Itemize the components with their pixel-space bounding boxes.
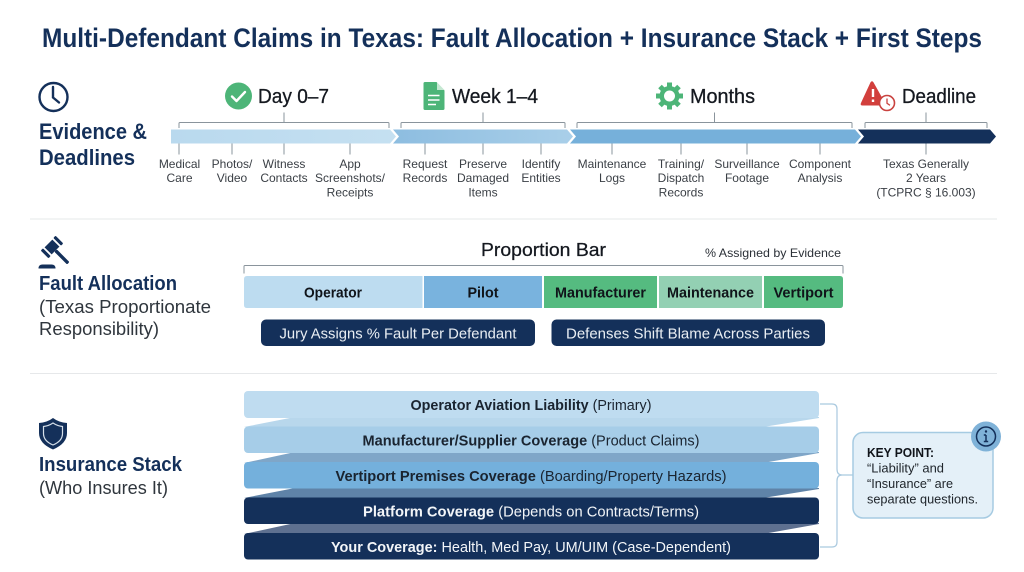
panel: insurance stack (39, 391, 1001, 560)
step labels: Surveillance (714, 157, 780, 171)
layer: manufacturer supplier coverage (244, 426, 819, 453)
phase: deadline (861, 82, 976, 110)
step labels: 2 Years (906, 171, 946, 185)
step labels: Care (166, 171, 193, 185)
callout text: KEY POINT: (867, 445, 934, 460)
callout: key point (853, 422, 1001, 518)
ticks below timeline (179, 144, 926, 154)
phase: day 0-7 (225, 82, 329, 110)
segment: manufacturer (544, 276, 657, 308)
icon: check circle (225, 82, 252, 110)
callout text: separate questions. (867, 492, 978, 506)
step labels: Maintenance (578, 157, 647, 171)
phase: week 1-4 (424, 82, 538, 110)
panel: fault allocation (38, 236, 843, 346)
subheading: who insures it: (Who Insures It) (39, 477, 168, 498)
step labels: Logs (599, 171, 625, 185)
step labels: Analysis (798, 171, 842, 185)
proportion bar (244, 276, 843, 308)
proportion bar heading: Proportion Bar (481, 239, 606, 260)
step labels: Training/ (658, 157, 705, 171)
phase: months (656, 82, 755, 110)
icon: gear (656, 82, 683, 110)
segment: operator (244, 276, 422, 308)
subheading: texas proportionate responsibility (39, 296, 211, 339)
step labels: Receipts (327, 186, 373, 200)
segment: vertiport (764, 276, 843, 308)
heading: fault allocation: Fault Allocation (39, 272, 177, 295)
step labels: Screenshots/ (315, 171, 386, 185)
phase label: Week 1–4 (452, 85, 538, 108)
segment: maintenance (659, 276, 762, 308)
layer: platform coverage (244, 498, 819, 524)
step labels: Component (789, 157, 852, 171)
stack connectors (244, 417, 819, 534)
step labels: Records (403, 171, 447, 185)
segment: manufacturer: Manufacturer (555, 284, 646, 302)
step labels: Entities (521, 171, 561, 185)
layer: operator aviation liability (244, 391, 819, 418)
segment: pilot: Pilot (468, 284, 499, 302)
layer: your coverage (244, 533, 819, 560)
layer: platform coverage: Platform Coverage (Depends on Contracts/Terms) (363, 504, 699, 520)
bracket over proportion bar (244, 266, 843, 274)
step labels: Damaged (457, 171, 509, 185)
step labels: Witness (263, 157, 305, 171)
heading: evidence and deadlines: Deadlines (39, 145, 135, 170)
phase label: Deadline (902, 85, 976, 108)
heading: insurance stack: Insurance Stack (39, 453, 183, 476)
heading: evidence and deadlines: Evidence & (39, 119, 147, 144)
subheading: texas proportionate responsibility: (Texas Proportionate (39, 296, 211, 317)
step labels: App (339, 157, 361, 171)
step labels: Contacts (260, 171, 308, 185)
step labels: Request (403, 157, 448, 171)
step labels: Photos/ (212, 157, 253, 171)
step labels: Items (468, 186, 498, 200)
timeline arrow bar (171, 130, 996, 144)
icon: gavel (38, 236, 76, 271)
segment: pilot (424, 276, 542, 308)
step labels: Dispatch (658, 171, 704, 185)
step labels (159, 157, 976, 200)
phase label: Day 0–7 (258, 85, 329, 108)
step labels: Video (217, 171, 248, 185)
icon: document (424, 82, 444, 110)
brackets above timeline (179, 112, 987, 128)
pill: jury assigns (261, 320, 535, 346)
step labels: Identify (522, 157, 560, 171)
icon: shield (39, 418, 67, 450)
step labels: Preserve (459, 157, 507, 171)
step labels: Texas Generally (883, 157, 969, 171)
pill: jury assigns: Jury Assigns % Fault Per Defendant (280, 326, 517, 342)
callout text: “Liability” and (867, 460, 944, 476)
step labels: Footage (725, 171, 769, 185)
icon: clock (40, 83, 68, 111)
heading: evidence and deadlines (39, 119, 147, 170)
step labels: (TCPRC § 16.003) (876, 186, 976, 200)
icon: warning with clock (861, 82, 894, 110)
bracket to callout (820, 404, 853, 547)
layer: vertiport premises coverage: Vertiport Premises Coverage (Boarding/Property Hazards) (336, 468, 726, 485)
segment: maintenance: Maintenance (667, 284, 754, 302)
layer: operator aviation liability: Operator Aviation Liability (Primary) (410, 397, 652, 414)
callout text: “Insurance” are (867, 476, 953, 491)
layer: vertiport premises coverage (244, 462, 819, 488)
layer: manufacturer supplier coverage: Manufacturer/Supplier Coverage (Product Claims) (362, 432, 700, 450)
layer: your coverage: Your Coverage: Health, Med Pay, UM/UIM (Case-Dependent) (331, 539, 731, 556)
segment: operator: Operator (304, 284, 362, 302)
note: assigned by evidence: % Assigned by Evidence (705, 246, 841, 260)
phase label: Months (690, 85, 755, 108)
step labels: Records (659, 186, 703, 200)
panel: evidence and deadlines (39, 82, 996, 200)
pill: defenses shift blame (552, 320, 825, 346)
icon: info (971, 422, 1001, 452)
callout text (867, 445, 978, 506)
step labels: Medical (159, 157, 200, 171)
pill: defenses shift blame: Defenses Shift Blame Across Parties (566, 326, 810, 342)
subheading: texas proportionate responsibility: Responsibility) (39, 318, 159, 339)
segment: vertiport: Vertiport (774, 284, 834, 302)
